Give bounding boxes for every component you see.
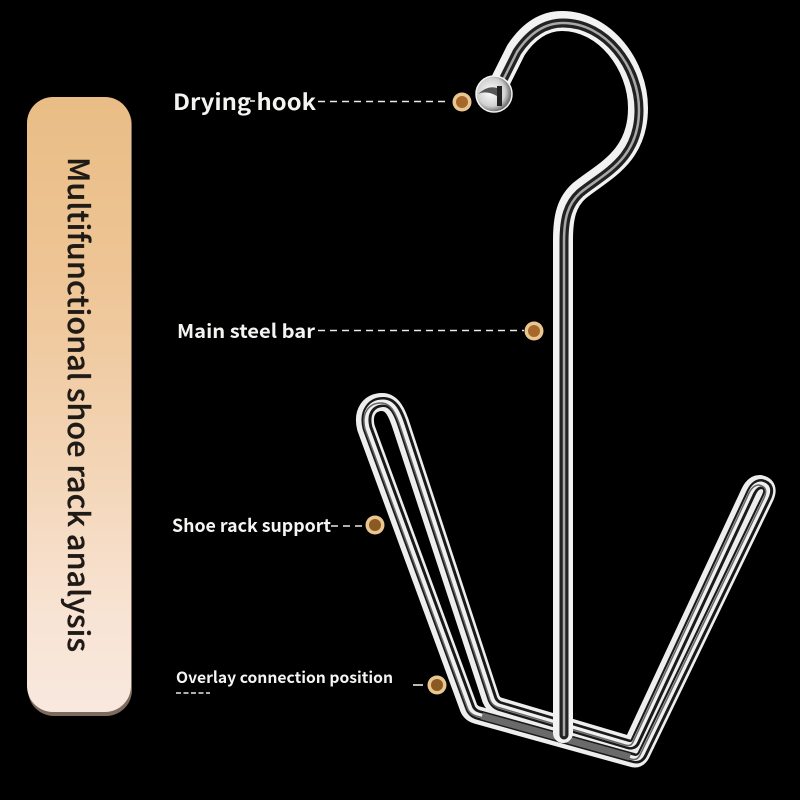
- main steel bar and hook: [498, 21, 639, 735]
- panel: title banner: [27, 97, 132, 716]
- base front band: [482, 716, 630, 757]
- shoe hanger illustration: [364, 21, 768, 760]
- hanger lower wire loop: [364, 402, 768, 760]
- callout: drying hook: [173, 85, 472, 117]
- callout: main steel bar: Main steel bar: [177, 317, 316, 344]
- callout: drying hook: Drying hook: [173, 85, 317, 117]
- callout: main steel bar: [177, 317, 544, 344]
- callout: overlay connection position: [176, 666, 446, 694]
- hook ball end: [476, 76, 512, 112]
- callout: shoe rack support: Shoe rack support: [172, 512, 331, 538]
- banner title: Multifunctional shoe rack analysis: [59, 157, 101, 652]
- callout: overlay connection position: Overlay connection position: [176, 666, 393, 688]
